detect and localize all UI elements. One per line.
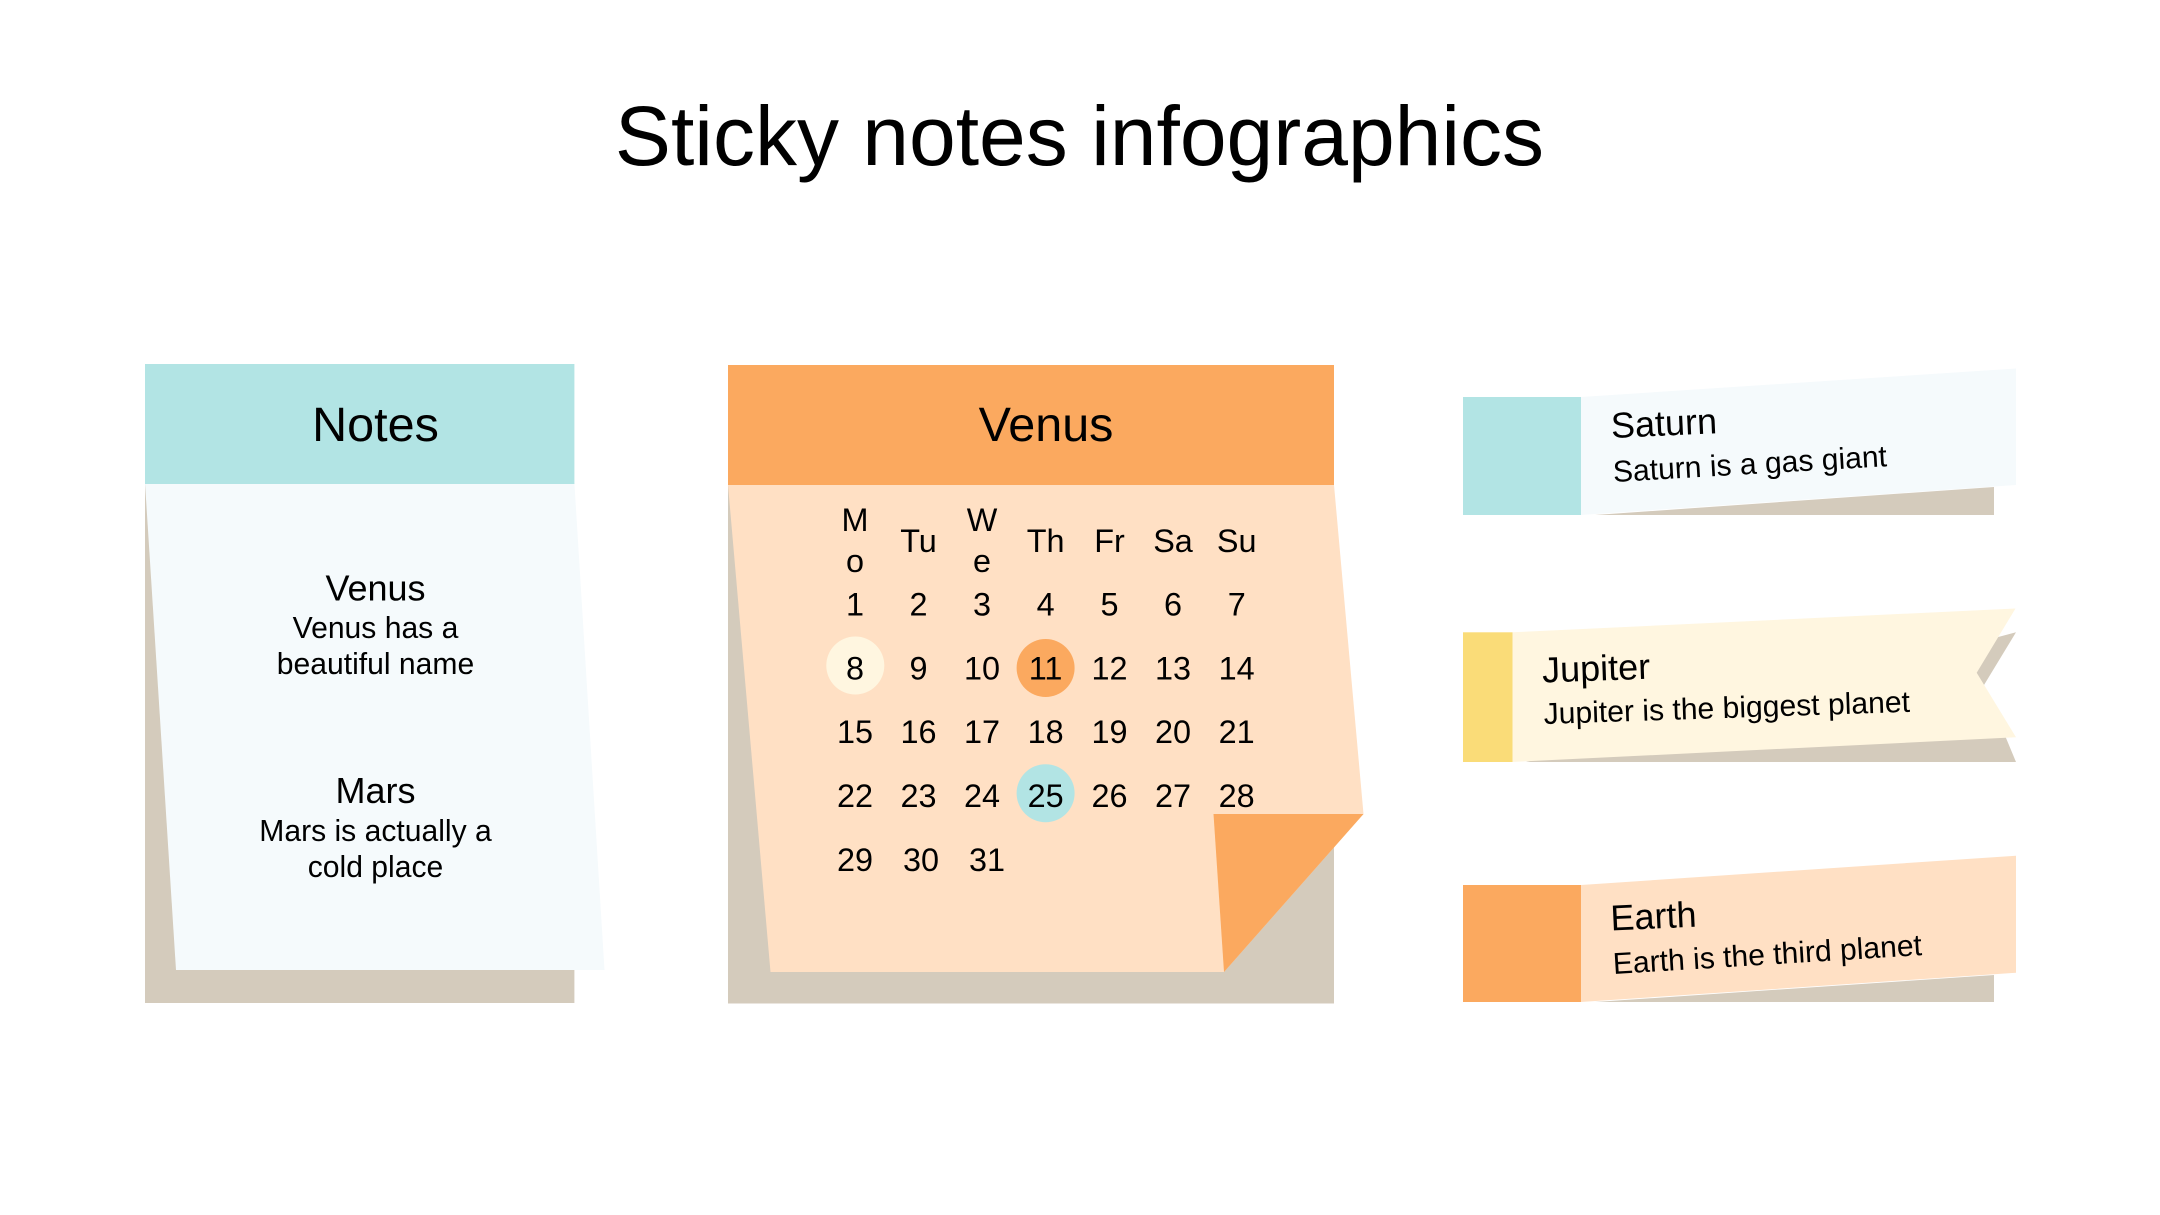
calendar dates: 9 — [909, 650, 928, 686]
calendar dates: 15 — [837, 714, 873, 750]
highlight: day 25 — [1017, 764, 1075, 822]
weekday headers: Sa — [1153, 523, 1194, 559]
weekday headers — [842, 502, 1257, 579]
calendar dates: 26 — [1091, 778, 1128, 814]
Jupiter shadow — [1526, 632, 2016, 762]
calendar header — [728, 365, 1334, 485]
calendar dates: 1 — [846, 587, 864, 623]
Earth heading: Earth — [1610, 894, 1697, 938]
calendar dates: 28 — [1219, 778, 1255, 814]
calendar dates — [837, 587, 1255, 878]
calendar dates: 22 — [837, 778, 873, 814]
weekday headers: W — [967, 502, 998, 538]
calendar dates: 27 — [1155, 778, 1191, 814]
panel: calendar — [728, 365, 1364, 1004]
calendar dates: 3 — [973, 587, 991, 623]
calendar dates: 18 — [1028, 714, 1064, 750]
panel: Earth ribbon — [1463, 856, 2016, 1002]
calendar paper — [728, 485, 1364, 972]
calendar dates: 4 — [1037, 587, 1055, 623]
notes header — [145, 364, 574, 484]
note: Mars — [259, 770, 492, 884]
weekday headers: M — [842, 502, 868, 538]
calendar dates: 12 — [1091, 650, 1128, 686]
calendar dates: 25 — [1028, 778, 1064, 814]
calendar dates: 7 — [1228, 587, 1246, 623]
note: Venus: Venus has a — [293, 612, 459, 645]
note: Venus: beautiful name — [277, 648, 474, 681]
note: Mars: Mars is actually a — [259, 815, 492, 848]
calendar dates: 30 — [903, 842, 939, 878]
Jupiter paper — [1512, 608, 2016, 762]
panel: Saturn ribbon — [1463, 368, 2016, 515]
calendar dates: 11 — [1029, 650, 1062, 686]
notes shadow — [145, 483, 574, 1003]
Saturn heading: Saturn — [1610, 400, 1718, 446]
calendar dates: 17 — [964, 714, 1000, 750]
calendar dates: 10 — [964, 650, 1000, 686]
highlight: day 8 — [826, 636, 884, 694]
calendar dates: 2 — [909, 587, 928, 623]
weekday headers: e — [973, 543, 991, 579]
calendar dates: 14 — [1219, 650, 1255, 686]
Earth shadow — [1595, 975, 1994, 1002]
calendar dates: 23 — [900, 778, 937, 814]
calendar dates: 21 — [1219, 714, 1255, 750]
note: Mars: cold place — [308, 851, 443, 884]
Saturn paper — [1581, 368, 2016, 515]
Saturn shadow — [1595, 487, 1994, 515]
weekday headers: Th — [1027, 523, 1065, 559]
calendar dates: 19 — [1091, 714, 1128, 750]
Earth text: Earth is the third planet — [1612, 929, 1923, 981]
highlight: day 11 — [1017, 639, 1075, 697]
notes heading: Notes — [312, 398, 439, 452]
calendar dates: 20 — [1155, 714, 1191, 750]
calendar page fold — [1214, 814, 1364, 972]
Jupiter colour tab — [1463, 632, 1512, 762]
weekday headers: Su — [1217, 523, 1257, 559]
Earth paper — [1581, 856, 2016, 1002]
calendar dates: 16 — [900, 714, 937, 750]
calendar dates: 31 — [969, 842, 1005, 878]
panel: Jupiter ribbon — [1463, 608, 2016, 762]
notes paper — [145, 483, 604, 970]
calendar shadow — [728, 485, 1334, 1004]
calendar heading: Venus — [979, 398, 1113, 452]
calendar dates: 29 — [837, 842, 873, 878]
Saturn text: Saturn is a gas giant — [1612, 440, 1888, 489]
weekday headers: o — [846, 543, 864, 579]
weekday headers: Fr — [1094, 523, 1125, 559]
Saturn colour tab — [1463, 397, 1581, 515]
Earth colour tab — [1463, 885, 1581, 1002]
calendar dates: 8 — [846, 650, 864, 686]
title: Sticky notes infographics — [615, 89, 1544, 183]
note: Mars: Mars — [336, 770, 416, 811]
Jupiter heading: Jupiter — [1541, 646, 1651, 690]
calendar dates: 24 — [964, 778, 1000, 814]
calendar dates: 5 — [1100, 587, 1119, 623]
note: Venus: Venus — [325, 568, 426, 608]
note: Venus — [277, 568, 474, 681]
calendar dates: 6 — [1164, 587, 1182, 623]
panel: notes — [145, 364, 604, 1003]
Jupiter text: Jupiter is the biggest planet — [1543, 686, 1911, 731]
weekday headers: Tu — [900, 523, 937, 559]
calendar dates: 13 — [1155, 650, 1191, 686]
